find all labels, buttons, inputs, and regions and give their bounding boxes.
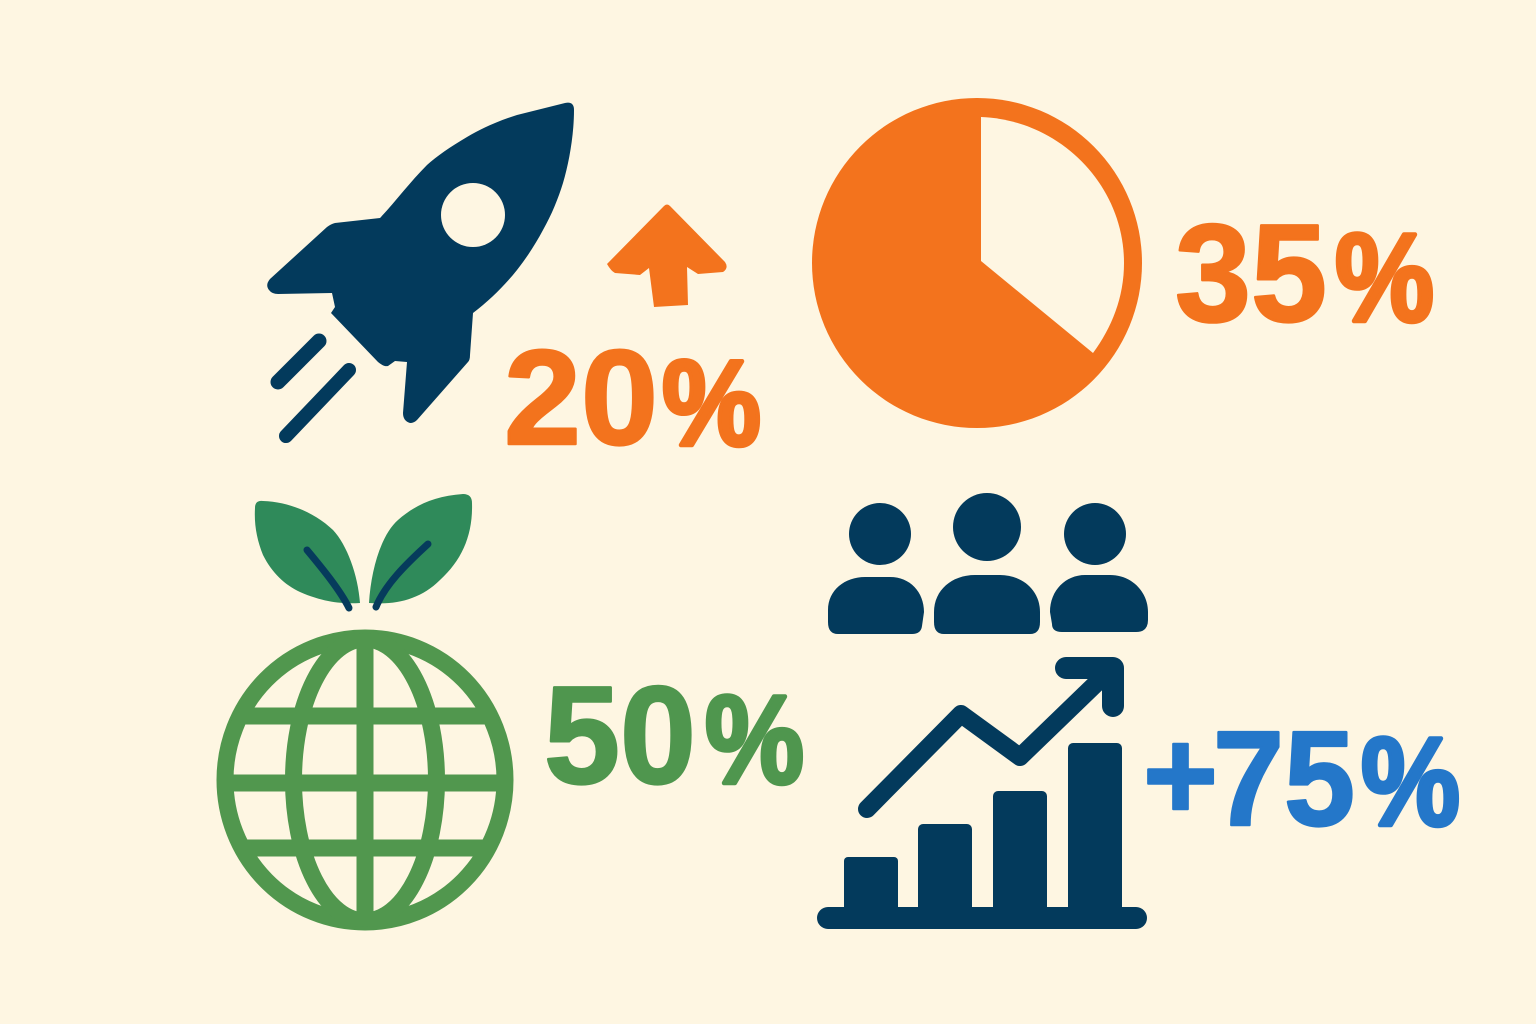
icon: people bbox=[828, 493, 1148, 634]
stat: 35%: 35 bbox=[1175, 196, 1327, 351]
stat: 50% bbox=[544, 658, 804, 813]
stat: 50%: % bbox=[705, 671, 804, 810]
icon: leaves bbox=[255, 494, 472, 608]
stat: +75%: 75 bbox=[1213, 703, 1355, 854]
stat: +75%: + bbox=[1143, 704, 1218, 847]
stat: 20% bbox=[504, 322, 761, 473]
icon: up arrow bbox=[607, 204, 727, 307]
chart: pie 35% bbox=[812, 98, 1142, 428]
chart: rising bars with trend arrow bbox=[817, 668, 1147, 929]
icon: globe bbox=[215, 638, 515, 922]
stat: 35%: % bbox=[1335, 209, 1434, 348]
stat: +75%: % bbox=[1361, 713, 1460, 852]
icon: rocket bbox=[267, 103, 574, 436]
stat: +75% bbox=[1143, 703, 1460, 854]
stat: 50%: 50 bbox=[544, 658, 696, 813]
stat: 20%: 20 bbox=[504, 322, 658, 473]
stat: 35% bbox=[1175, 196, 1434, 351]
stat: 20%: % bbox=[662, 335, 761, 471]
